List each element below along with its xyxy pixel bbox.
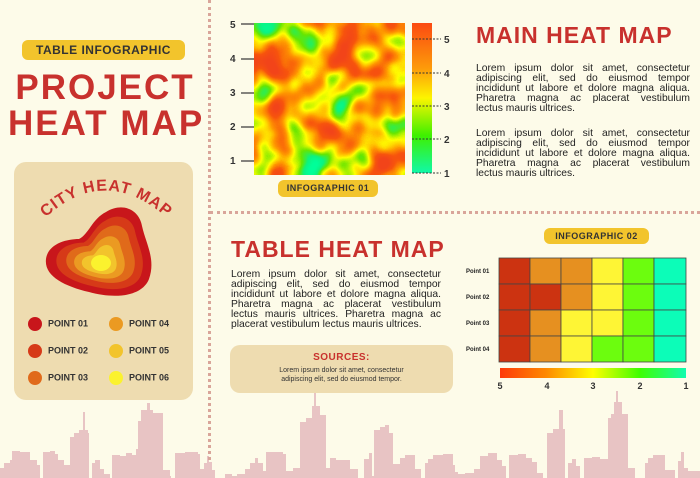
text block: main paragraphs: incididunt ut labore et dolore magna aliqua.: [476, 148, 690, 159]
callout: sources: Lorem ipsum dolor sit amet, consectetur: [279, 367, 404, 374]
chart: main heat map: 4: [444, 69, 450, 80]
text block: main paragraphs: Lorem ipsum dolor sit amet, consectetur: [476, 63, 690, 74]
callout: sources: adipiscing elit, sed do eiusmod tempor.: [281, 376, 402, 383]
legend: POINT 01: [48, 318, 88, 328]
text block: table paragraph: Pharetra magna ac placerat vestibulum: [231, 299, 441, 310]
chart: table heat map: Point 02: [466, 295, 490, 301]
chart: table heat map: 1: [683, 381, 689, 391]
tag: infographic 01: [278, 180, 378, 197]
tag: infographic 01: INFOGRAPHIC 01: [287, 183, 369, 193]
text block: main paragraphs: lectus mauris ultrices.: [476, 168, 575, 179]
text block: main paragraphs: Lorem ipsum dolor sit amet, consectetur: [476, 128, 690, 139]
divider: horizontal dotted: [210, 211, 700, 214]
divider: vertical dotted: [208, 0, 211, 460]
chart: main heat map: 5: [444, 35, 450, 46]
text block: table paragraph: incididunt ut labore et dolore magna aliqua.: [231, 289, 441, 300]
chart: main heat map: 4: [230, 54, 236, 65]
chart: main heat map: 1: [230, 156, 236, 167]
chart: table heat map: Point 03: [466, 321, 490, 327]
callout: sources: SOURCES:: [313, 352, 370, 363]
legend: POINT 03: [48, 372, 88, 382]
chart: main heat map: 3: [230, 88, 236, 99]
title: PROJECT: [15, 68, 195, 107]
chart: main heat map: 2: [444, 135, 450, 146]
chart: main heat map: 5: [230, 20, 236, 31]
chart: table heat map: Point 01: [466, 269, 490, 275]
text block: main paragraphs: [476, 63, 690, 179]
text block: main paragraphs: adipiscing elit, sed do eiusmod tempor: [476, 138, 690, 149]
legend: POINT 05: [129, 345, 169, 355]
panel: city heat map: [14, 162, 193, 400]
text block: table paragraph: adipiscing elit, sed do eiusmod tempor: [231, 279, 441, 290]
legend: [28, 317, 169, 385]
icon: heat blob: [46, 207, 152, 296]
legend: POINT 04: [129, 318, 169, 328]
heading: table heat map: TABLE HEAT MAP: [231, 236, 445, 262]
chart: table heat map: 5: [497, 381, 503, 391]
heading: city heat map (arc): CITY HEAT MAP: [40, 180, 172, 215]
text block: table paragraph: [231, 269, 441, 330]
text block: main paragraphs: adipiscing elit, sed do eiusmod tempor: [476, 73, 690, 84]
text block: table paragraph: placerat vestibulum lectus mauris ultrices.: [231, 319, 422, 330]
title: [8, 68, 204, 143]
chart: main heat map: [230, 20, 450, 180]
chart: table heat map: [466, 258, 689, 391]
chart: table heat map: 2: [637, 381, 643, 391]
text block: main paragraphs: lectus mauris ultrices.: [476, 103, 575, 114]
text block: main paragraphs: Pharetra magna ac placerat vestibulum: [476, 158, 690, 169]
chart: main heat map: 3: [444, 102, 450, 113]
heading: main heat map: MAIN HEAT MAP: [476, 22, 673, 48]
chart: table heat map: Point 04: [466, 347, 490, 353]
tag: infographic 02: [544, 228, 649, 244]
chart: table heat map: 4: [544, 381, 550, 391]
text block: main paragraphs: Pharetra magna ac placerat vestibulum: [476, 93, 690, 104]
chart: main heat map: 2: [230, 122, 236, 133]
tag: table infographic: TABLE INFOGRAPHIC: [36, 43, 171, 57]
chart: table heat map: 3: [590, 381, 596, 391]
callout: sources: [230, 345, 453, 393]
legend: POINT 02: [48, 345, 88, 355]
text block: main paragraphs: incididunt ut labore et dolore magna aliqua.: [476, 83, 690, 94]
text block: table paragraph: lectus mauris ultrices. Pharetra magna ac: [231, 309, 441, 320]
chart: main heat map: 1: [444, 169, 450, 180]
text block: table paragraph: Lorem ipsum dolor sit amet, consectetur: [231, 269, 441, 280]
title: HEAT MAP: [8, 104, 204, 143]
tag: table infographic: [22, 40, 185, 60]
tag: infographic 02: INFOGRAPHIC 02: [555, 231, 638, 241]
legend: POINT 06: [129, 372, 169, 382]
